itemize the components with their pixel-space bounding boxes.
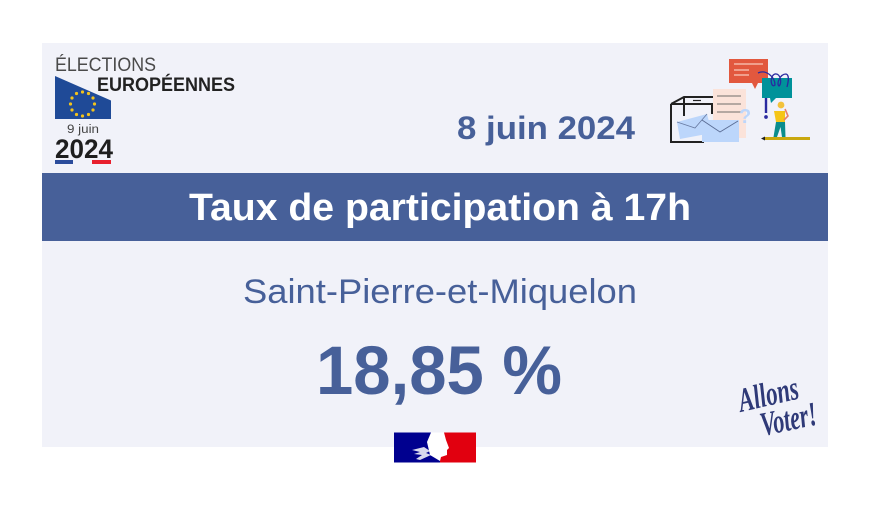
- date heading: 8 juin 2024: [457, 110, 635, 146]
- icon: scribble and exclamation mark: [758, 72, 788, 118]
- icon: red speech bubble: [729, 59, 768, 89]
- logo: élections européennes 2024: [55, 55, 235, 164]
- icon: european flag: [55, 76, 111, 119]
- illustration: ballot box, envelopes and speech bubbles: [671, 59, 810, 142]
- logo: allons voter: [733, 370, 820, 444]
- voter: Voter!: [757, 396, 820, 444]
- title band: [42, 173, 828, 241]
- logo heading: européennes: EUROPÉENNES: [97, 74, 235, 96]
- logo date: 9 juin: [67, 124, 99, 136]
- icon: question mark: ?: [739, 106, 751, 128]
- logo: république française: [394, 432, 476, 462]
- icon: document: [713, 89, 746, 138]
- territory name: Saint-Pierre-et-Miquelon: [243, 273, 637, 311]
- title: Taux de participation à 17h: [189, 187, 691, 229]
- icon: teal speech bubble: [762, 78, 792, 103]
- icon: envelopes: [677, 114, 739, 142]
- allons: Allons: [733, 370, 802, 420]
- logo year: 2024: [55, 134, 113, 164]
- logo tricolour bars: [55, 160, 111, 164]
- icon: pencil: [761, 136, 810, 140]
- icon: ballot box: [671, 97, 716, 142]
- panel: background card: [42, 43, 828, 447]
- icon: person: [774, 102, 788, 137]
- participation rate: 18,85 %: [316, 332, 562, 409]
- logo heading: élections: ÉLECTIONS: [55, 55, 156, 76]
